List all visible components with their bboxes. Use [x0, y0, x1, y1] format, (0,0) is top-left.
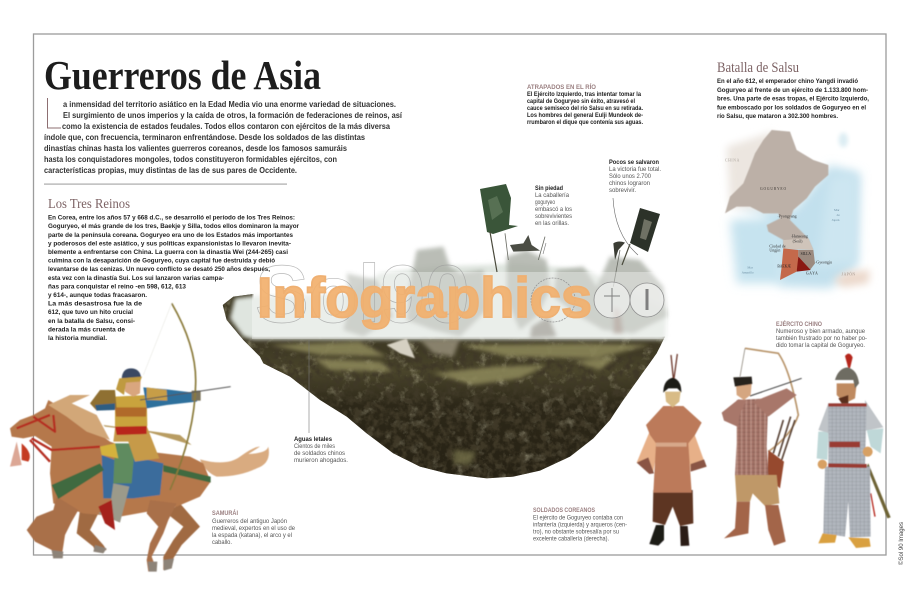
callout: Atrapados en el río — [527, 83, 643, 126]
callout: Pocos se salvaron — [609, 159, 661, 255]
head — [665, 392, 681, 407]
map labels: Japón — [832, 218, 840, 222]
callout: Soldados coreanos: El ejército de Goguryeo contaba con — [533, 514, 624, 522]
callout: Sin piedad: embascó a los — [535, 206, 572, 213]
callout: Aguas letales: Cientos de miles — [294, 443, 335, 450]
callout: Samurái: SAMURÁI — [212, 510, 238, 517]
girth bands — [52, 463, 104, 499]
callout: Ejército chino: dido tomar la capital de Goguryeo. — [776, 342, 865, 349]
callout: Samurái: caballo. — [212, 539, 232, 546]
panel: Los Tres Reinos: levantarse de las cenizas. Un nuevo conflicto se desató 250 años después, — [48, 266, 270, 273]
arrow — [750, 378, 802, 396]
arm left — [90, 390, 117, 411]
callout: Aguas letales — [294, 340, 348, 464]
rider leg — [113, 443, 135, 483]
map labels: ·Pyongyang — [777, 214, 797, 219]
Baekje — [780, 248, 798, 280]
panel: Batalla de Salsu: río Salsu, que mataron a 302.300 hombres. — [717, 113, 838, 120]
trim — [828, 403, 867, 468]
callout: Sin piedad: La caballería — [535, 192, 570, 199]
hands — [818, 460, 827, 469]
boots — [649, 525, 664, 546]
tassel — [871, 493, 875, 517]
head — [736, 383, 752, 400]
intro text block: características propias, muy distintas de las de sus pares de Occidente. — [44, 166, 297, 175]
icon: dark war flag — [622, 208, 660, 265]
panel: Batalla de Salsu: bres. Una parte de esas tropas, el Ejército Izquierdo, — [717, 96, 869, 103]
bow — [170, 303, 196, 490]
illustration: Korean infantry soldier — [637, 354, 707, 546]
map labels: (Seúl) — [793, 239, 803, 244]
panel: Los Tres Reinos: en la batalla de Salsu, consi- — [48, 318, 135, 325]
panel: Batalla de Salsu — [717, 60, 869, 120]
callout: Samurái: Guerreros del antiguo Japón — [212, 518, 288, 525]
callout: Sin piedad — [535, 185, 572, 254]
callout: Soldados coreanos: infantería (izquierda) y arqueros (cen- — [533, 522, 627, 528]
sword — [867, 463, 891, 518]
scene haze on island top — [230, 263, 667, 339]
callout: Samurái: la espada (katana), el arco y el — [212, 532, 292, 539]
heading: Batalla de Salsu: Batalla de Salsu — [717, 60, 799, 76]
intro text block: El surgimiento de unos imperios y la caída de otros, la formación de federaciones de reinos, así — [63, 111, 403, 120]
panel: Los Tres Reinos: culmina con la desaparición de Goguryeo, cuya capital fue destruida y debió — [48, 258, 275, 265]
intro text block: como la existencia de estados feudales. Todos ellos contaron con ejércitos de la más diversa — [62, 122, 390, 131]
map labels: Mar — [834, 208, 840, 212]
callout: Sin piedad: sobrevivientes — [535, 213, 572, 220]
torso — [828, 403, 867, 467]
pale China ground — [727, 132, 780, 210]
map labels: Ciudad de — [769, 243, 786, 248]
panel: Los Tres Reinos: 612, que tuvo un hito crucial — [48, 309, 133, 316]
panel: Batalla de Salsu: Goguryeo al frente de un ejército de 1.133.800 hom- — [717, 87, 868, 94]
mane — [48, 395, 110, 440]
callout: Atrapados en el río: ATRAPADOS EN EL RÍO — [527, 83, 596, 91]
callout: Ejército chino: también frustrado por no haber po- — [776, 335, 867, 342]
callout: Atrapados en el río: cauce semiseco del río Salsu en su retirada. — [527, 105, 643, 112]
bridle and reins — [17, 415, 100, 462]
Hanseong zone — [783, 238, 813, 250]
map labels: Ungjin — [769, 248, 780, 253]
callout: Sin piedad: goguryeo — [535, 199, 555, 206]
soldier silhouettes — [343, 247, 667, 338]
boots — [724, 502, 750, 538]
illustration: samurai archer on horseback — [10, 303, 269, 572]
map labels: GOGURYEO — [760, 187, 787, 191]
drop cap L — [48, 98, 61, 128]
panel: Los Tres Reinos: y 614-, aunque todas fracasaron. — [48, 292, 147, 299]
callout: Atrapados en el río: rrumbaron el dique que contenía sus aguas. — [527, 119, 643, 126]
armour skirt — [113, 426, 159, 462]
callout: Atrapados en el río: capital de Goguryeo sin éxito, atravesó el — [527, 98, 635, 105]
panel: Los Tres Reinos — [48, 196, 300, 342]
callout: Pocos se salvaron: sobrevivir. — [609, 187, 636, 194]
panel: Los Tres Reinos: ñas para conquistar el reino -en 598, 612, 613 — [48, 283, 186, 290]
head and helmet — [125, 380, 141, 397]
callout: Pocos se salvaron: Pocos se salvaron — [609, 159, 659, 166]
illustration: Chinese archer — [722, 348, 802, 546]
panel: Los Tres Reinos: La más desastrosa fue la de — [48, 301, 142, 308]
callout: Atrapados en el río: Los hombres del general Eulji Mundeok de- — [527, 112, 643, 119]
intro text block: índole que, con frecuencia, terminaron enfrentándose. Desde los soldados de las distintas — [44, 133, 365, 142]
legs — [653, 490, 693, 526]
callout: Ejército chino: EJÉRCITO CHINO — [776, 320, 822, 328]
callout: Atrapados en el río: El Ejército Izquierdo, tras intentar tomar la — [527, 91, 642, 98]
callout: Sin piedad: en las orillas. — [535, 220, 569, 227]
scabbard — [103, 425, 192, 445]
callout: Soldados coreanos — [533, 507, 627, 542]
callout: Aguas letales: de soldados chinos — [294, 450, 345, 457]
intro text block: a inmensidad del territorio asiático en la Edad Media vio una enorme variedad de situaciones. — [63, 100, 396, 109]
boots — [818, 533, 837, 543]
callout: Ejército chino — [776, 320, 867, 349]
callout: Samurái: medieval, expertos en el uso de — [212, 525, 296, 532]
quiver — [767, 450, 784, 488]
arms — [722, 399, 747, 427]
panel: Batalla de Salsu: fue emboscado por los soldados de Goguryeo en el — [717, 104, 866, 111]
arm right — [143, 387, 200, 408]
map labels: CHINA — [725, 159, 740, 163]
horse body — [10, 400, 211, 517]
callout: Soldados coreanos: tro), no obstante sobresalía por su — [533, 528, 620, 536]
far legs — [77, 510, 107, 552]
panel: Los Tres Reinos: derada la más cruenta de — [48, 326, 125, 333]
watermark: Infographics — [257, 266, 592, 330]
Gaya — [797, 257, 811, 272]
illustration: Chinese armoured soldier — [817, 354, 891, 548]
watermark: Sol90 — [255, 249, 470, 340]
Silla — [798, 250, 815, 270]
helmet — [835, 367, 859, 388]
callout: Pocos se salvaron: chinos lograron — [609, 180, 651, 187]
rider helmet — [510, 235, 540, 252]
map labels: de — [837, 213, 840, 217]
map labels: BAEKJE — [777, 264, 792, 268]
map labels: ·Hanseong — [791, 234, 808, 239]
panel: Los Tres Reinos: y poderosos del este asiático, y sus políticas expansionistas lo llevaron inevita- — [48, 241, 291, 248]
arrow — [140, 387, 231, 400]
face — [837, 383, 857, 403]
sea — [733, 165, 860, 288]
map labels — [725, 159, 856, 277]
plume — [845, 354, 853, 368]
pants — [735, 475, 779, 506]
feather — [671, 354, 677, 378]
callout: Pocos se salvaron: La victoria fue total. — [609, 166, 661, 173]
callout: Aguas letales: murieron ahogados. — [294, 457, 348, 464]
panel: Los Tres Reinos: Goguryeo, el más grande de los tres, Baekje y Silla, todos ellos dominaron la mayor — [48, 223, 300, 230]
callout: Pocos se salvaron: Sólo unos 2.700 — [609, 173, 652, 180]
callout: Soldados coreanos: excelente caballería (derecha). — [533, 536, 609, 542]
map labels: SILLA — [801, 252, 811, 256]
panel: Los Tres Reinos: En Corea, entre los años 57 y 668 d.C., se desarrolló el período de los Tres Reinos: — [48, 214, 295, 222]
panel: Batalla de Salsu: En el año 612, el emperador chino Yangdi invadió — [717, 78, 858, 85]
rock body — [220, 293, 670, 480]
watermark band — [252, 272, 667, 339]
map labels: GAYA — [806, 271, 818, 275]
ground debris — [387, 338, 415, 358]
intro text block: hasta los conquistadores mongoles, todos constituyeron formidables ejércitos, con — [44, 155, 337, 164]
panel: Los Tres Reinos: la historia mundial. — [48, 335, 107, 342]
title: Guerreros de Asia — [44, 52, 321, 98]
map labels: ·Gyeongju — [815, 259, 832, 264]
battlefield floating island — [220, 233, 670, 480]
callout: Soldados coreanos: SOLDADOS COREANOS — [533, 507, 595, 514]
callout: Aguas letales: Aguas letales — [294, 436, 333, 443]
map: Korean peninsula — [725, 130, 870, 288]
intro text block — [44, 98, 403, 175]
saddle cloth — [102, 455, 163, 498]
callout: Ejército chino: Numeroso y bien armado, aunque — [776, 328, 866, 335]
belt — [656, 443, 687, 447]
panel: Los Tres Reinos: parte de la península coreana. Goguryeo era uno de los Estados más importantes — [48, 232, 293, 239]
map labels: JAPÓN — [842, 272, 856, 277]
torso — [115, 395, 147, 427]
panel: Los Tres Reinos: esta vez con la dinastía Sui. Los sui lanzaron varias campa- — [48, 275, 224, 282]
sleeves — [637, 427, 660, 472]
near foreleg — [27, 497, 78, 558]
callout: Sin piedad: Sin piedad — [535, 185, 563, 192]
credit: ©Sol 90 Images — [898, 522, 905, 565]
Goguryeo land — [725, 130, 828, 250]
lake and Japan — [839, 133, 848, 147]
icon: green war flag — [480, 184, 518, 272]
olive terraces — [270, 342, 650, 385]
watermark — [255, 249, 664, 340]
torso armour — [735, 398, 768, 475]
shoulders — [818, 403, 830, 433]
robe — [646, 406, 702, 493]
hooves — [52, 545, 174, 572]
near hind leg — [147, 500, 177, 572]
heading: Los Tres Reinos: Los Tres Reinos — [48, 196, 130, 211]
bow — [745, 348, 798, 452]
sleeves — [817, 432, 828, 460]
horse tail — [200, 447, 269, 477]
callout: Samurái — [212, 510, 296, 546]
map labels: Amarillo — [742, 270, 754, 274]
pants — [823, 467, 871, 537]
intro text block: dinastías chinas hasta los valientes guerreros coreanos, desde los famosos samuráis — [44, 144, 347, 153]
map labels: Mar — [747, 266, 754, 270]
panel: Los Tres Reinos: blemente a enfrentarse con China. La guerra con la dinastía Wei (244-265) casi — [48, 249, 288, 256]
